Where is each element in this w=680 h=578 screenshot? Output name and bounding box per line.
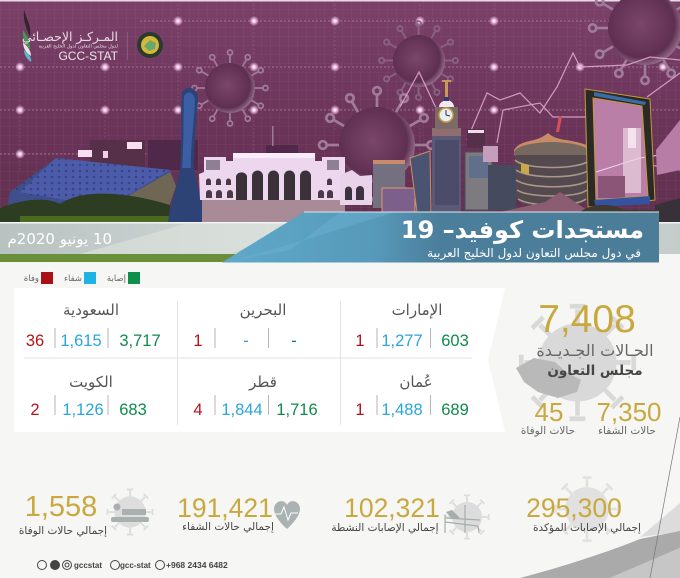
recoveries: حالات الشفاء (598, 425, 656, 437)
Kuwait: 2 (30, 401, 40, 419)
Saudi Arabia (26, 301, 161, 350)
Qatar (193, 373, 318, 419)
stat: total recoveries (177, 493, 300, 533)
stat: active cases: 102,321 (344, 493, 440, 523)
UAE: 603 (441, 332, 469, 350)
Saudi Arabia: 36 (26, 332, 44, 350)
Qatar: 1,716 (276, 401, 318, 419)
footer contacts: gccstat (74, 561, 102, 570)
market trend lines (400, 53, 680, 180)
data grid with glowing points (0, 0, 680, 170)
date text: 10 يونيو 2020م (8, 230, 112, 248)
Qatar: قطر (248, 373, 277, 391)
Bahrain: 1 (193, 332, 203, 350)
logo: GCC-STAT: المـركـز الإحصـائي (22, 29, 118, 45)
title text: مستجدات كوفيد– 19 (401, 216, 644, 244)
stat: total confirmed: إجمالي الإصابات المؤكدة (533, 522, 641, 534)
stat: total confirmed: 295,300 (526, 493, 622, 523)
UAE: 1,277 (381, 332, 423, 350)
icon: virus and map (516, 306, 634, 419)
legend: إصابة (107, 274, 126, 284)
stat: total confirmed (526, 478, 641, 540)
Makkah clock tower and towers (373, 81, 516, 212)
legend: شفاء (64, 274, 82, 284)
Bahrain round tower (500, 116, 590, 212)
virus: lower centre (319, 87, 435, 203)
virus: top centre (379, 21, 458, 100)
UAE (355, 301, 469, 350)
GCC label: مجلس التعاون (547, 363, 643, 379)
Bahrain (193, 301, 297, 350)
virus: large centre left (192, 50, 268, 126)
Kuwait: 1,126 (62, 401, 104, 419)
Oman (355, 373, 469, 419)
stat: total deaths: 1,558 (25, 491, 97, 523)
stat: total recoveries: 191,421 (177, 493, 273, 523)
icon: hospital bed with virus (445, 495, 489, 539)
footer contacts: gcc-stat (120, 561, 151, 570)
background city silhouettes (78, 126, 298, 170)
Kuwait building (0, 158, 176, 222)
GCC emblem (137, 32, 163, 58)
stat: active cases (331, 493, 489, 539)
title panel (222, 212, 659, 262)
icon: social circles (38, 560, 164, 570)
Oman palace right wing (340, 170, 372, 205)
footer contacts (38, 560, 228, 570)
Saudi Arabia: 1,615 (60, 332, 102, 350)
Kuwait: الكويت (69, 373, 113, 391)
stat: total deaths (19, 490, 152, 537)
footer contacts: +968 2434 6482 (166, 560, 228, 570)
Bahrain: - (243, 332, 249, 350)
UAE: 1 (355, 332, 365, 350)
Kuwait: 683 (119, 401, 147, 419)
legend (24, 272, 140, 284)
Qatar: 1,844 (221, 401, 263, 419)
logo ribbon (23, 10, 31, 62)
country table panel (14, 288, 505, 432)
new cases label: الحـالات الجـديـدة (536, 341, 654, 360)
stat: active cases: إجمالي الإصابات النشطة (331, 522, 439, 534)
stat: total recoveries: إجمالي حالات الشفاء (182, 521, 274, 533)
deaths: حالات الوفاة (521, 425, 575, 437)
icon: virus (556, 478, 618, 540)
logo: GCC-STAT (22, 10, 163, 63)
Saudi Arabia: السعودية (63, 301, 119, 319)
logo: GCC-STAT: لدول مجلس التعاون لدول الخليج العربية (38, 44, 119, 50)
Oman: 1 (355, 401, 365, 419)
recoveries: 7,350 (596, 397, 662, 427)
stat: total deaths: إجمالي حالات الوفاة (19, 525, 107, 537)
decorative swoosh (520, 417, 680, 578)
Oman: 1,488 (381, 401, 423, 419)
GCC summary block (516, 298, 662, 437)
Bahrain: البحرين (240, 301, 286, 319)
Dubai frame (580, 89, 680, 222)
legend: وفاة (24, 274, 39, 284)
Kuwait (30, 373, 147, 419)
header photo collage (0, 0, 680, 223)
Saudi Arabia: 3,717 (119, 332, 161, 350)
Bahrain: - (291, 332, 297, 350)
virus: top right (589, 0, 680, 84)
Oman palace (199, 153, 345, 222)
icon: heart with pulse (274, 501, 300, 529)
Qatar: 4 (193, 401, 203, 419)
UAE: الإمارات (392, 301, 442, 319)
icon: patient lying with virus (108, 490, 152, 534)
date band (0, 222, 680, 262)
logo: GCC-STAT: GCC-STAT (58, 49, 119, 63)
subtitle text: في دول مجلس التعاون لدول الخليج العربية (427, 246, 641, 261)
Qatar torch tower (168, 88, 204, 222)
deaths: 45 (535, 397, 563, 427)
new cases number: 7,408 (538, 298, 636, 341)
Oman: عُمان (399, 373, 433, 391)
deaths (521, 397, 575, 437)
Oman: 689 (441, 401, 469, 419)
